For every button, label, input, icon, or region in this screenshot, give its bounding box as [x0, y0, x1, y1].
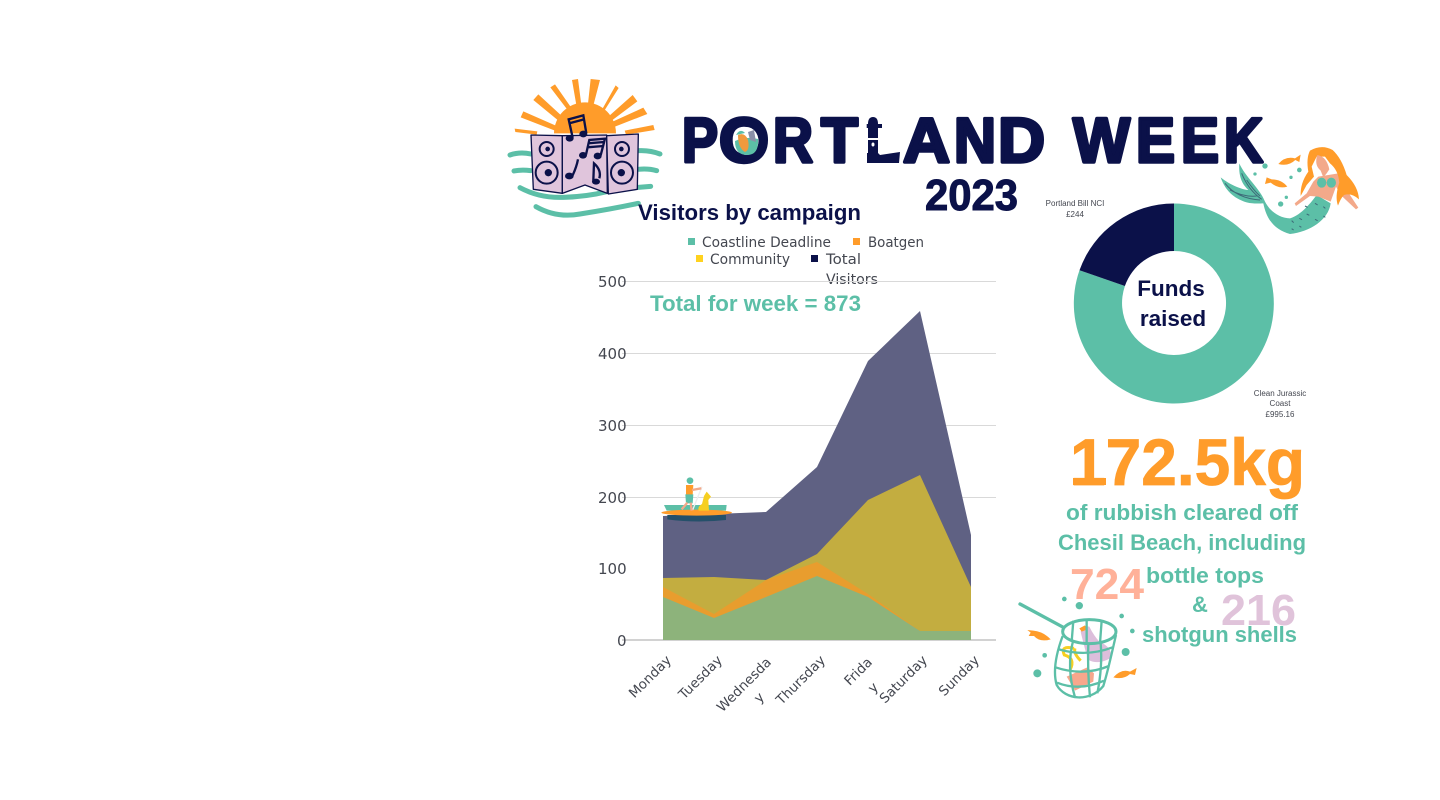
text: rubbish description: of rubbish cleared off	[1066, 500, 1299, 525]
icon: paddleboarder and dog	[661, 477, 732, 522]
area: coastline deadline	[663, 576, 971, 640]
x axis labels	[626, 653, 983, 715]
segment: clean jurassic coast	[1074, 204, 1274, 403]
y axis labels: 200	[598, 489, 627, 507]
legend: Community	[710, 252, 790, 268]
title: Portland Week: K	[1224, 106, 1263, 176]
title: Portland Week: E	[1136, 106, 1175, 176]
legend: Boatgen	[868, 235, 924, 251]
y axis labels: 500	[598, 273, 627, 291]
mermaid hair	[1301, 147, 1359, 206]
x axis labels: Wednesda	[714, 655, 775, 715]
x axis labels: Thursday	[772, 653, 829, 709]
area: community	[663, 475, 971, 640]
x axis labels: Sunday	[936, 653, 983, 700]
title: Portland Week: N	[954, 106, 996, 176]
donut label: clean jurassic coast: Clean Jurassic	[1254, 389, 1306, 398]
stat: bottle tops: 724	[1070, 560, 1145, 609]
stat: bottle tops: bottle tops	[1146, 563, 1264, 588]
y axis labels: 300	[598, 417, 627, 435]
y axis labels: 100	[598, 560, 627, 578]
donut label: portland bill	[1046, 199, 1104, 219]
mermaid tail	[1221, 163, 1331, 234]
x axis labels: Frida	[841, 655, 876, 689]
donut label: portland bill: Portland Bill NCI	[1046, 199, 1104, 208]
donut label: clean jurassic coast: £995.16	[1266, 410, 1295, 419]
x axis labels: y	[865, 680, 882, 696]
area: boatgen	[663, 562, 971, 640]
heading: visitors by campaign: Visitors by campaign	[638, 200, 861, 225]
mermaid face	[1316, 155, 1329, 177]
donut centre label: raised	[1140, 306, 1206, 331]
stat: shotgun shells: 216	[1221, 586, 1296, 635]
y axis labels	[598, 273, 627, 650]
title: year 2023: 2023	[925, 171, 1018, 220]
donut label: portland bill: £244	[1066, 210, 1084, 219]
icon: fishing net with rubbish	[1020, 597, 1137, 697]
stat: shotgun shells	[1142, 586, 1297, 647]
icon: mermaid	[1221, 147, 1359, 234]
x axis labels: Saturday	[876, 653, 931, 707]
donut centre label	[1137, 276, 1206, 331]
donut centre label: Funds	[1137, 276, 1205, 301]
big stat: rubbish weight: 172.5kg	[1070, 425, 1305, 499]
icon: globe inside letter O	[734, 127, 758, 155]
title: Portland Week: A	[903, 106, 950, 176]
stat: bottle tops	[1070, 560, 1264, 609]
title: Portland Week: W	[1073, 106, 1131, 176]
title: Portland Week: T	[821, 106, 858, 176]
area: total visitors	[663, 311, 971, 640]
title: Portland Week: P	[682, 106, 718, 176]
title: Portland Week	[682, 106, 1263, 176]
x axis labels: Monday	[626, 653, 675, 702]
title: Portland Week: E	[1181, 106, 1219, 176]
legend: Total	[825, 252, 861, 268]
text: ampersand: &	[1192, 592, 1208, 617]
mermaid body	[1295, 173, 1358, 209]
legend: Coastline Deadline	[702, 235, 831, 251]
legend	[688, 235, 924, 288]
x axis labels: Tuesday	[675, 653, 726, 703]
area chart: visitors per day	[598, 273, 996, 715]
text: rubbish description: Chesil Beach, including	[1058, 530, 1306, 555]
donut chart: funds raised	[1074, 203, 1274, 403]
x axis labels: y	[751, 690, 768, 706]
segment: portland bill nci	[1080, 203, 1174, 286]
icon: lighthouse letter L	[867, 117, 900, 163]
title: Portland Week: O	[719, 106, 769, 176]
stat: shotgun shells: shotgun shells	[1142, 622, 1297, 647]
title: Portland Week: R	[773, 106, 813, 176]
icon: sun and speakers logo	[510, 79, 660, 215]
text: rubbish description	[1058, 500, 1306, 555]
title: Portland Week: D	[998, 106, 1045, 176]
legend: Visitors	[826, 272, 878, 288]
y axis labels: 0	[617, 632, 627, 650]
y axis labels: 400	[598, 345, 627, 363]
donut label: clean jurassic coast	[1254, 389, 1306, 419]
callout: total for week: Total for week = 873	[650, 291, 861, 316]
donut label: clean jurassic coast: Coast	[1270, 399, 1291, 408]
